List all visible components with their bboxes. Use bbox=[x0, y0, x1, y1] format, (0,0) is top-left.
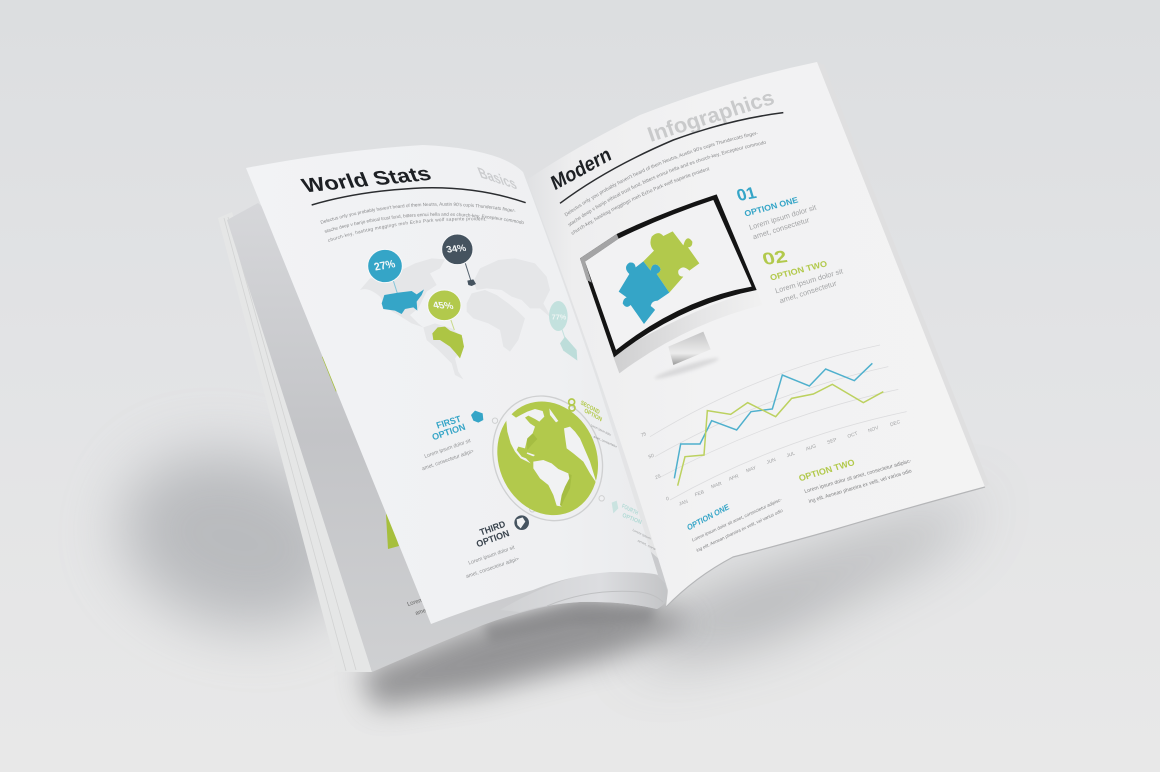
x axis labels: MAY bbox=[746, 465, 758, 474]
second option bbox=[569, 399, 618, 449]
pin: 34 percent bbox=[442, 234, 476, 286]
second option: Lorem ipsum dolor bbox=[590, 423, 612, 437]
recycle icon bbox=[569, 399, 575, 411]
globe bbox=[481, 386, 615, 530]
monitor frame bbox=[580, 194, 757, 357]
option 02: 02 bbox=[760, 247, 789, 269]
left page sheet bbox=[246, 145, 658, 624]
chart caption: option two: OPTION TWO bbox=[797, 457, 856, 483]
intro text: church-key, hashtag meggings meh Echo Park wolf sapente proident. bbox=[572, 167, 710, 234]
header rule bbox=[312, 188, 526, 205]
x axis labels: OCT bbox=[847, 431, 858, 440]
second option: SECOND bbox=[580, 399, 601, 416]
chart gridlines bbox=[650, 345, 907, 500]
third option: amet, consectetur adipi> bbox=[465, 556, 520, 580]
x axis labels bbox=[678, 419, 901, 508]
second option: amet, consectetur bbox=[593, 435, 618, 449]
globe icon bbox=[514, 515, 529, 530]
line chart bbox=[640, 345, 913, 553]
right page bbox=[548, 62, 985, 606]
intro text: church-key, hashtag meggings meh Echo Park wolf sapente proident. bbox=[328, 216, 486, 242]
second option: OPTION bbox=[583, 407, 603, 424]
world map bbox=[360, 234, 577, 379]
monitor screen bbox=[585, 200, 752, 350]
third option: Lorem ipsum dolor sit bbox=[468, 545, 516, 567]
intro text: stache deep v banjo ethical trust fund, bitters ennui hella and es church-key, Excepteur commodo bbox=[324, 212, 524, 233]
left page bbox=[246, 145, 658, 624]
continent shadows bbox=[527, 433, 572, 508]
y axis labels bbox=[640, 431, 670, 503]
first option: OPTION bbox=[431, 422, 467, 442]
heading: Infographics: Infographics bbox=[645, 86, 777, 147]
hidden page text bbox=[406, 598, 429, 617]
option 01 bbox=[735, 184, 817, 241]
fourth option: FOURTH bbox=[621, 503, 639, 517]
outer loose sheets bbox=[218, 212, 372, 672]
first option: Lorem ipsum dolor sit bbox=[424, 438, 472, 460]
pin: 27 percent USA: 27% bbox=[373, 258, 397, 274]
hidden page text: Lorem bbox=[406, 598, 424, 608]
first option: FIRST bbox=[435, 414, 463, 431]
pin: 27 percent USA bbox=[368, 249, 424, 314]
right page header and monitor bbox=[499, 86, 844, 382]
chart caption: option one: ing elit. Aenean pharetra ex velit, vel varius odio bbox=[696, 508, 784, 553]
monitor stand bbox=[668, 332, 711, 365]
third option bbox=[465, 515, 529, 580]
option 02: amet, consectetur bbox=[778, 278, 838, 305]
puzzle green bbox=[643, 231, 699, 293]
first option: amet, consectetur adipi> bbox=[421, 449, 475, 472]
fourth option: amet, cons bbox=[637, 539, 657, 551]
hidden page text: amet bbox=[414, 607, 429, 617]
green shape lower bbox=[386, 510, 399, 549]
third option: THIRD bbox=[478, 519, 507, 538]
third option: OPTION bbox=[475, 528, 511, 549]
x axis labels: JUL bbox=[786, 451, 796, 459]
series: option one bbox=[674, 363, 872, 478]
monitor silver corner bbox=[580, 234, 619, 283]
fourth option: OPTION bbox=[621, 513, 642, 526]
series: option two bbox=[678, 384, 883, 486]
globe section bbox=[421, 379, 657, 580]
chart caption: option two: ing elit. Aenean pharetra ex velit, vel varius odio bbox=[808, 468, 913, 505]
option 02 bbox=[760, 247, 844, 305]
shaded inner page bbox=[227, 203, 668, 672]
y axis labels: 25 bbox=[655, 473, 662, 481]
x axis labels: JAN bbox=[678, 499, 689, 508]
header rule bbox=[560, 113, 783, 203]
option 01: amet, consectetur bbox=[752, 215, 811, 241]
pin: 45 percent Brazil bbox=[428, 290, 464, 358]
x axis labels: AUG bbox=[805, 443, 817, 453]
puzzle icon bbox=[471, 411, 483, 423]
option 01: 01 bbox=[735, 184, 758, 205]
option 01: Lorem ipsum dolor sit bbox=[748, 203, 817, 232]
map landmasses bbox=[360, 258, 552, 379]
pin: faded teal bbox=[549, 301, 577, 361]
intro text: stache deep v banjo ethical trust fund, bitters ennui hella and es church-key, Excepteur commodo bbox=[568, 140, 766, 226]
option 01: OPTION ONE bbox=[743, 194, 800, 219]
option 02: OPTION TWO bbox=[769, 258, 829, 283]
monitor shadow bbox=[654, 355, 720, 381]
continents group bbox=[506, 408, 597, 508]
cast shadow on the surface bbox=[102, 428, 985, 708]
option 02: Lorem ipsum dolor sit bbox=[774, 266, 844, 295]
intro text: Delectus only you probably haven't heard of them Neutra, Austin 90's cupis Thundercats finger- bbox=[320, 202, 516, 224]
intro text bbox=[320, 202, 524, 242]
fourth icon bbox=[612, 501, 618, 513]
puzzle blue bbox=[619, 261, 669, 324]
pin: 45 percent Brazil: 45% bbox=[432, 300, 455, 312]
chart caption: option two: Lorem ipsum dolor sit amet, consectetur adipisc- bbox=[804, 458, 913, 495]
fourth option bbox=[612, 501, 657, 551]
pin: 34 percent: 34% bbox=[445, 243, 468, 256]
x axis labels: NOV bbox=[868, 425, 880, 434]
first option bbox=[421, 411, 483, 472]
fourth option: Lorem ipsum bbox=[632, 528, 651, 541]
x axis labels: SEP bbox=[827, 437, 838, 446]
heading: Modern: Modern bbox=[548, 143, 614, 195]
y axis labels: 50 bbox=[648, 453, 655, 461]
x axis labels: FEB bbox=[694, 489, 705, 498]
back pages of the book bbox=[218, 203, 668, 672]
x axis labels: APR bbox=[728, 473, 740, 483]
x axis labels: MAR bbox=[711, 481, 723, 490]
chart caption: option one: OPTION ONE bbox=[686, 501, 731, 532]
right page bottom edge bbox=[666, 487, 985, 607]
green shape showing through bbox=[322, 350, 340, 392]
pin: faded teal: 77% bbox=[552, 312, 567, 321]
heading: World Stats: World Stats bbox=[299, 163, 435, 197]
y axis labels: 75 bbox=[640, 431, 647, 439]
left page header and world map bbox=[299, 163, 578, 379]
x axis labels: DEC bbox=[890, 419, 901, 428]
monitor chin bbox=[613, 290, 763, 373]
monitor bbox=[580, 194, 763, 381]
x axis labels: JUN bbox=[766, 457, 777, 466]
page block at gutter bbox=[500, 570, 668, 612]
orbit ring bbox=[474, 379, 621, 537]
continents bbox=[506, 408, 597, 507]
heading: Basics: Basics bbox=[475, 164, 519, 193]
intro text: Delectus only you probably haven't heard of them Neutra, Austin 90's cupis Thundercats finger- bbox=[564, 132, 758, 216]
right page edge strip bbox=[817, 62, 989, 488]
y axis labels: 0 bbox=[666, 496, 670, 503]
chart caption: option one: Lorem ipsum dolor sit amet, consectetur adipisc- bbox=[691, 497, 783, 543]
right page sheet bbox=[527, 62, 985, 607]
